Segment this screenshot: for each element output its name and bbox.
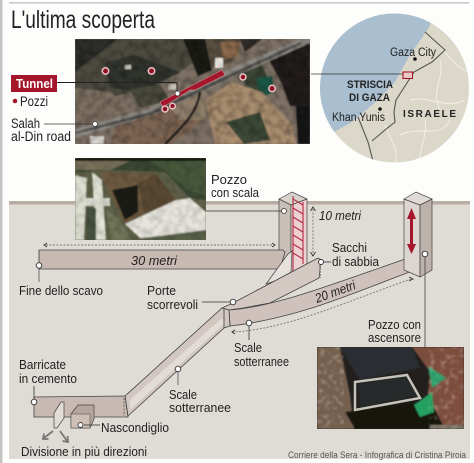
label: Scale sotterranee right — [234, 320, 289, 369]
label: Fine dello scavo — [19, 250, 103, 298]
label: Sacchi di sabbia — [318, 240, 380, 269]
tunnel: 30 metri — [39, 250, 285, 269]
aerial photo — [75, 39, 310, 144]
label: Scale sotterranee left: Scale — [169, 387, 197, 402]
dimension: 20 metres arrow — [232, 277, 413, 334]
map label: Khan Yunis — [332, 107, 385, 124]
ramp from ladder shaft — [266, 251, 292, 284]
ladder — [293, 196, 303, 272]
hiding place box — [71, 405, 100, 428]
label: Nascondiglio: Nascondiglio — [101, 420, 169, 435]
lower branch tunnel: 20 metri: 20 metri — [312, 277, 358, 306]
label: Scale sotterranee right: sotterranee — [234, 354, 289, 369]
label: Pozzo con scala: Pozzo — [211, 172, 247, 187]
tunnel: 30 metri: 30 metri — [131, 253, 178, 268]
wells — [102, 68, 275, 112]
label: Porte scorrevoli — [147, 283, 236, 312]
label: Porte scorrevoli: scorrevoli — [147, 297, 198, 312]
label: Barricate in cemento: Barricate — [19, 357, 66, 372]
map label: Striscia di Gaza — [347, 79, 393, 104]
arrows: splitting directions — [43, 431, 68, 442]
label: Salah al-Din road: Salah — [11, 116, 40, 131]
label: Scale sotterranee right: Scale — [234, 340, 262, 355]
panel: cross-section ground — [9, 201, 470, 459]
label: Pozzo con scala: con scala — [211, 185, 260, 200]
shaft with lift — [404, 192, 432, 277]
concrete barricade — [54, 402, 64, 428]
map label: Gaza City: Gaza City — [390, 47, 436, 59]
map label: Israele: ISRAELE — [403, 109, 456, 120]
dimension: 30 metres arrow — [44, 243, 275, 247]
label: Pozzo con ascensore — [368, 251, 428, 347]
legend: tunnel: Tunnel — [16, 77, 53, 91]
tunnel line — [160, 70, 225, 107]
map label: Striscia di Gaza: DI GAZA — [349, 92, 390, 104]
label: Salah al-Din road — [11, 116, 97, 144]
label: Barricate in cemento — [19, 357, 77, 405]
label: Pozzo con ascensore: Pozzo con — [368, 317, 421, 332]
label: Fine dello scavo: Fine dello scavo — [19, 283, 103, 298]
upper branch tunnel — [222, 258, 321, 310]
road — [75, 39, 310, 138]
label: Sacchi di sabbia: Sacchi — [332, 240, 367, 255]
photo: well with ladder — [75, 158, 206, 240]
label: Scale sotterranee left — [169, 366, 231, 415]
legend: wells — [13, 94, 48, 109]
label: Barricate in cemento: in cemento — [19, 371, 77, 386]
lower branch tunnel: 20 metri — [229, 257, 415, 326]
lower horizontal tunnel — [34, 396, 128, 417]
lift arrow — [407, 208, 416, 254]
label: Scale sotterranee left: sotterranee — [169, 400, 231, 415]
label: Porte scorrevoli: Porte — [147, 283, 176, 298]
label: Sacchi di sabbia: di sabbia — [332, 254, 380, 269]
legend: wells: Pozzi — [20, 94, 48, 109]
photo: well with lift — [317, 347, 464, 429]
title: L'ultima scoperta — [11, 6, 155, 34]
map connector line — [311, 73, 403, 75]
dimension: 10 metri: 10 metri — [319, 208, 362, 223]
label: Divisione in più direzioni: Divisione in più direzioni — [21, 444, 147, 459]
label: Pozzo con scala — [206, 172, 286, 214]
map label: Khan Yunis: Khan Yunis — [332, 112, 385, 124]
aerial markers: tunnel and wells — [102, 68, 275, 112]
locator map — [318, 12, 471, 165]
label: Salah al-Din road: al-Din road — [11, 129, 71, 144]
shaft with ladder — [279, 192, 307, 278]
dimension: 10 metri — [310, 207, 362, 256]
diagonal stairs tunnel — [125, 308, 230, 416]
map marker: tunnel area — [403, 72, 412, 78]
legend: tunnel — [11, 75, 180, 96]
map label: Striscia di Gaza: STRISCIA — [347, 79, 393, 91]
label: Pozzo con ascensore: ascensore — [368, 330, 421, 345]
